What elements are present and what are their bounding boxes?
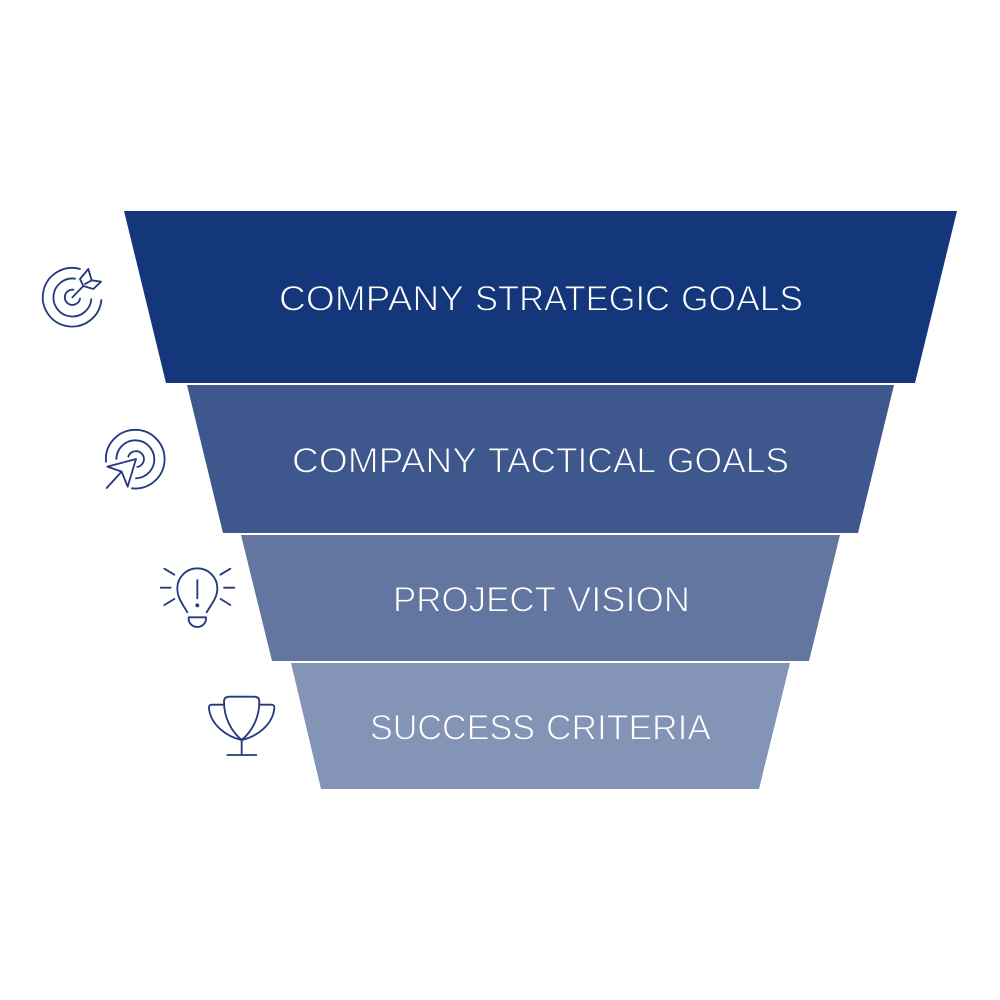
panel: project vision xyxy=(241,535,840,661)
label: company tactical goals: COMPANY xyxy=(292,440,477,480)
label: company tactical goals: TACTICAL xyxy=(488,440,656,480)
label: success criteria: SUCCESS xyxy=(370,708,535,748)
label: success criteria: CRITERIA xyxy=(546,708,711,748)
label: company strategic goals: STRATEGIC xyxy=(475,278,670,318)
panel: company tactical goals xyxy=(187,385,894,533)
label: success criteria xyxy=(370,708,711,748)
icon: target with cursor arrow xyxy=(106,430,165,489)
icon: light bulb with exclamation xyxy=(161,568,234,627)
icon: target with dart xyxy=(43,268,101,327)
icon: trophy xyxy=(209,697,274,755)
label: company strategic goals: COMPANY xyxy=(279,278,464,318)
label: company strategic goals xyxy=(279,278,803,318)
panel: company strategic goals xyxy=(124,211,957,383)
label: company tactical goals: GOALS xyxy=(667,440,789,480)
label: project vision: VISION xyxy=(567,580,690,620)
label: company strategic goals: GOALS xyxy=(681,278,803,318)
label: company tactical goals xyxy=(292,440,789,480)
label: project vision xyxy=(393,580,690,620)
label: project vision: PROJECT xyxy=(393,580,556,620)
panel: success criteria xyxy=(291,663,790,789)
